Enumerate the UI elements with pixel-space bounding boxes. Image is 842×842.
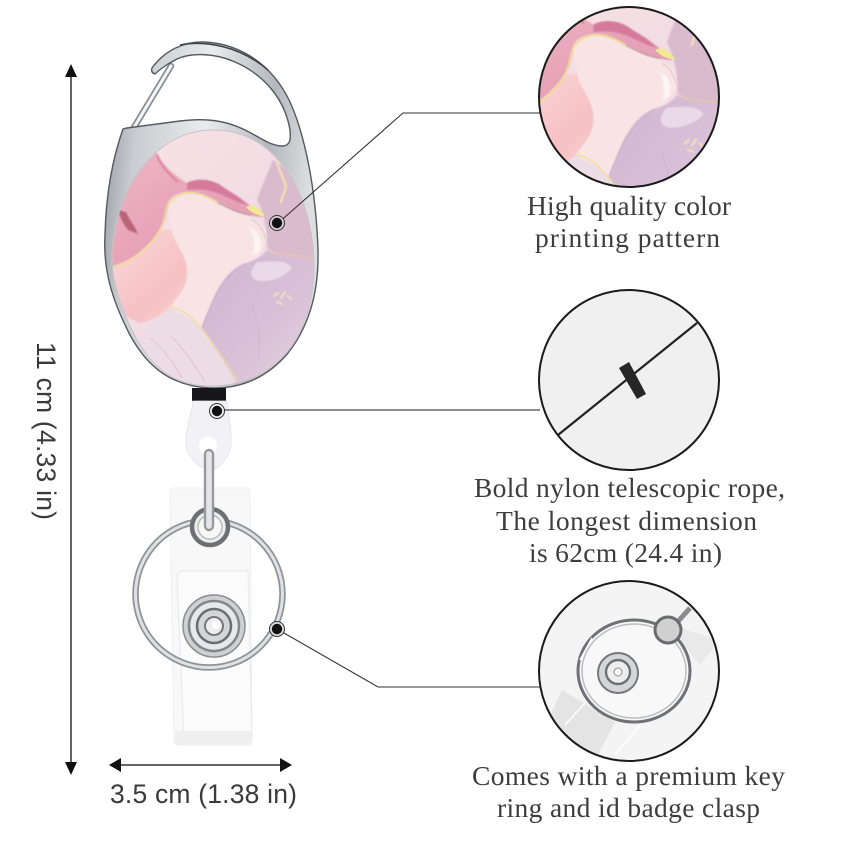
marker dot: rope	[210, 404, 224, 418]
marker dot: ring	[270, 622, 284, 636]
marker dot: pattern	[270, 216, 284, 230]
caption: pattern: printing pattern	[535, 222, 720, 253]
detail circle: printed pattern	[538, 6, 720, 188]
wire gate of carabiner	[127, 66, 171, 139]
leader line: rope	[218, 409, 540, 411]
caption: ring: Comes with a premium key	[472, 760, 785, 791]
print bezel line	[112, 130, 314, 386]
detail circle: nylon rope	[539, 290, 719, 470]
caption: ring	[472, 760, 785, 823]
height dimension arrow	[65, 64, 77, 775]
snap button	[183, 595, 245, 657]
caption: rope	[474, 472, 785, 568]
split key ring	[136, 520, 282, 668]
D-ring link	[205, 450, 213, 530]
black collar	[192, 388, 226, 401]
product: retractable badge reel	[104, 41, 319, 746]
height label: 11 cm (4.33 in)	[31, 342, 61, 520]
caption: pattern: High quality color	[527, 190, 731, 221]
caption: rope: The longest dimension	[496, 505, 757, 536]
marble printed face	[112, 130, 314, 386]
caption: ring: ring and id badge clasp	[497, 792, 760, 823]
clear vinyl strap	[170, 488, 252, 745]
caption: pattern	[527, 190, 731, 253]
eyelet	[192, 509, 228, 545]
dark hook edge highlight	[180, 43, 268, 70]
metal carabiner shell	[105, 42, 318, 388]
detail circle: key ring and clasp	[530, 581, 720, 770]
leader line: ring	[277, 629, 540, 687]
width dimension arrow	[109, 758, 292, 772]
leader line: pattern	[277, 113, 540, 224]
swivel hole	[199, 437, 217, 455]
white swivel	[186, 401, 231, 470]
caption: rope: Bold nylon telescopic rope,	[474, 472, 785, 503]
caption: rope: is 62cm (24.4 in)	[529, 537, 722, 568]
width label: 3.5 cm (1.38 in)	[110, 779, 297, 809]
